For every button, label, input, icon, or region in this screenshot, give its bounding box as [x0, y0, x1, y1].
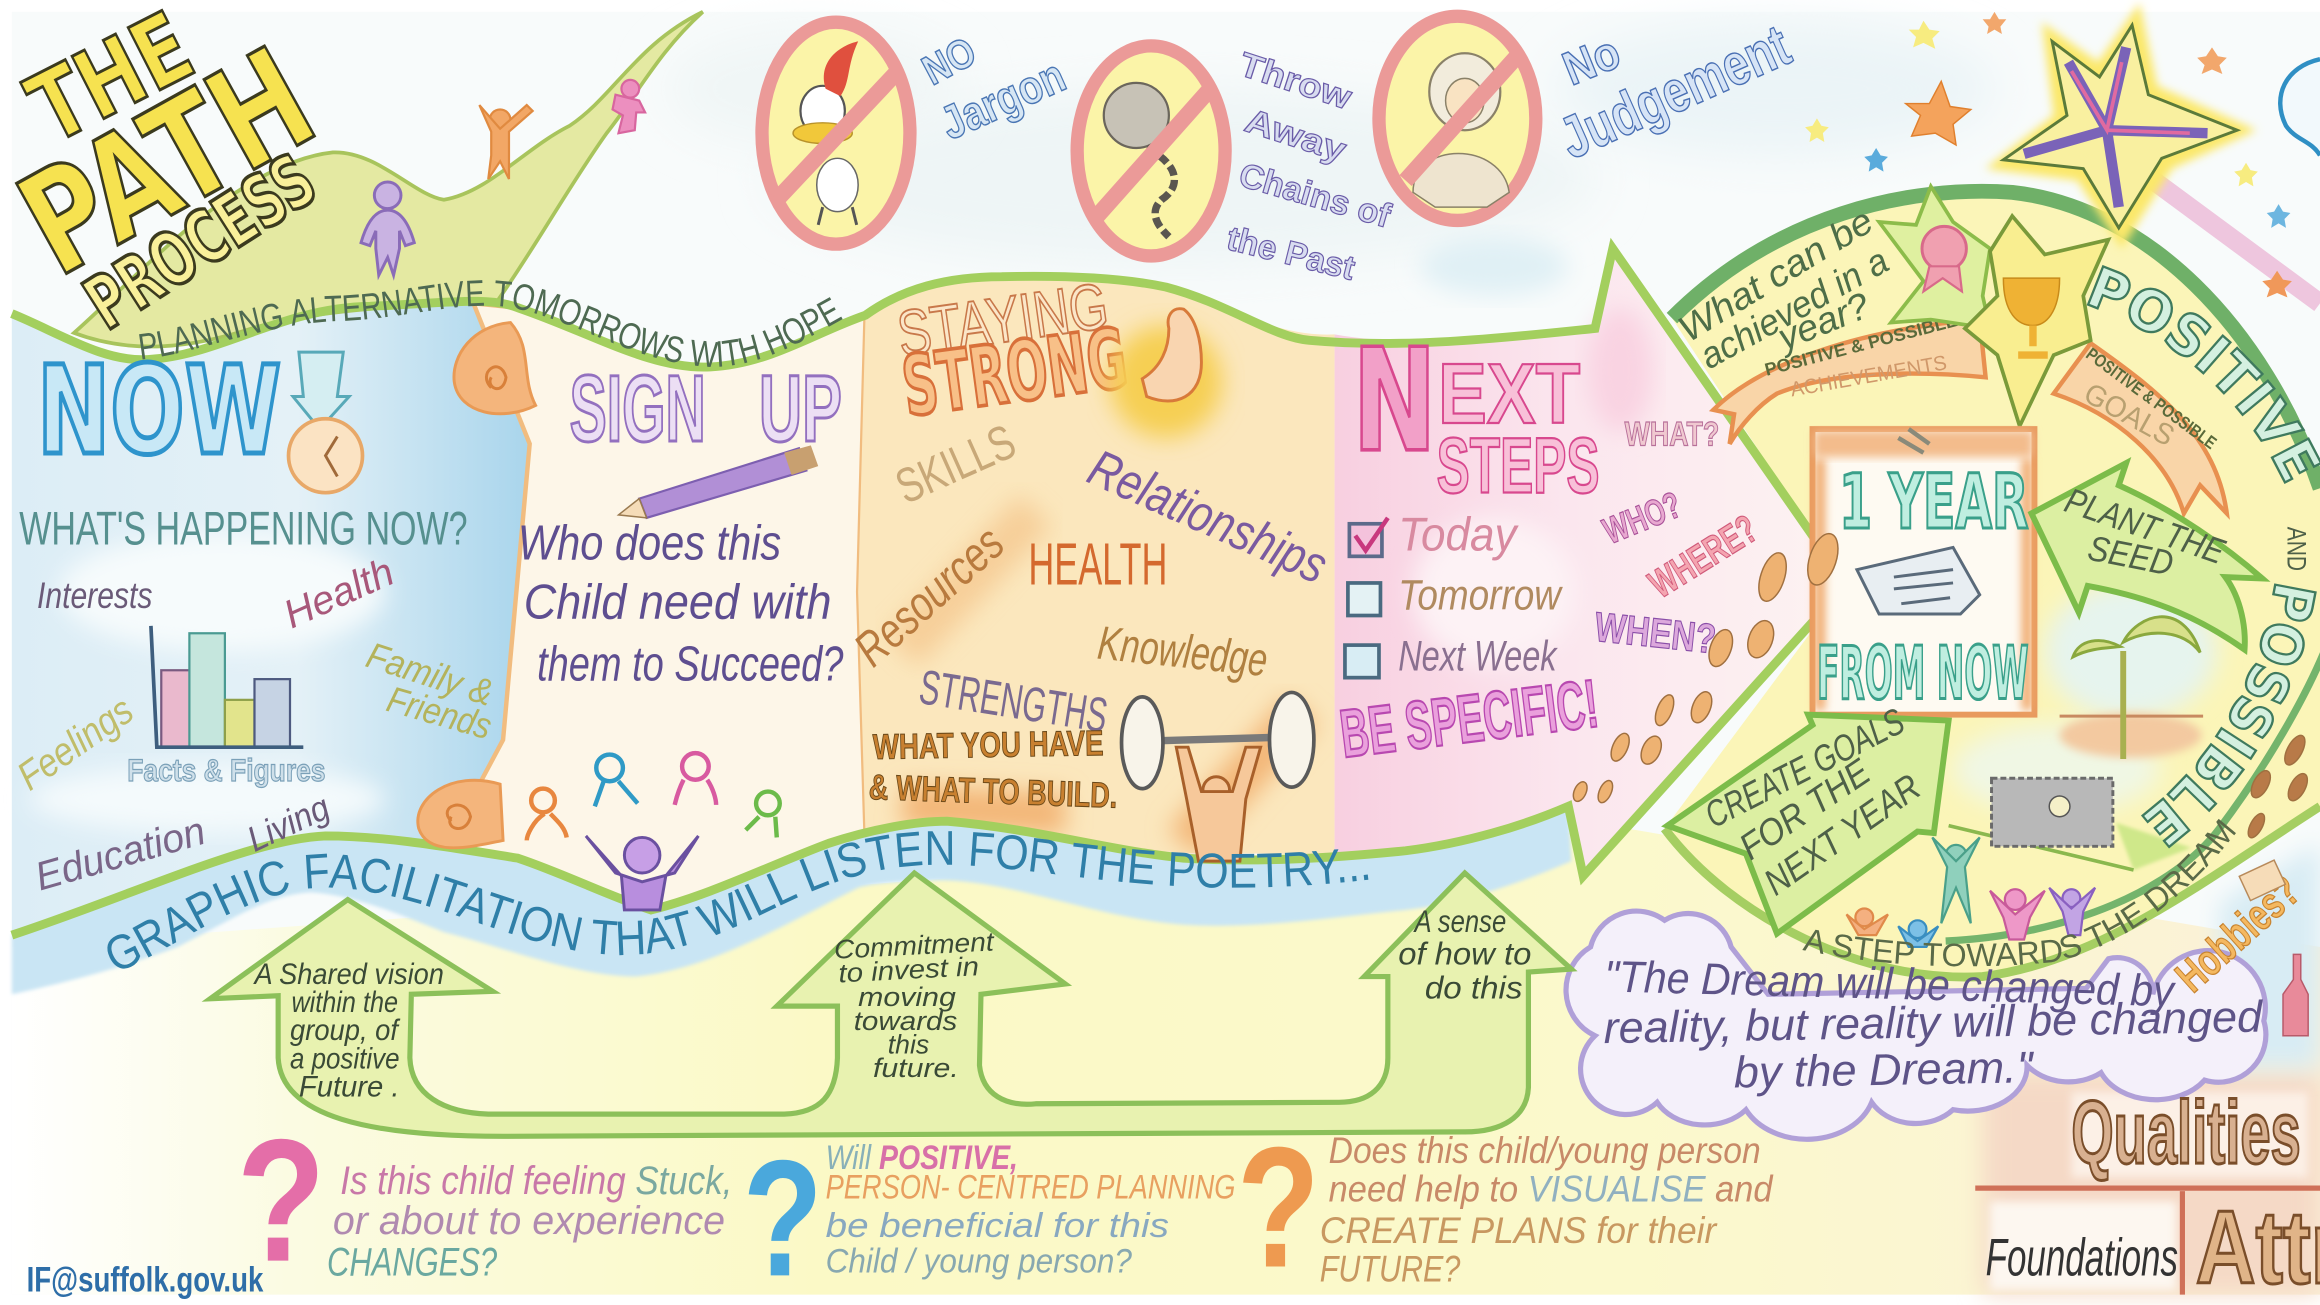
- text: does this child need help: [1320, 1130, 1774, 1289]
- arrow text: commitment: to invest in: [838, 951, 980, 988]
- callout: hobbies: [2167, 860, 2309, 1036]
- text: who does this child need: Who does this: [518, 516, 781, 570]
- text: and: AND: [2281, 527, 2311, 571]
- panel: one year from now board: [1812, 429, 2034, 716]
- text: throw away chains of the past: [1223, 45, 1395, 288]
- heading: next steps: STEPS: [1437, 422, 1599, 510]
- text: will positive person-centred planning: Will POSITIVE,: [826, 1139, 1018, 1177]
- icon: no judgement sign: [1379, 16, 1536, 220]
- text: what you have and what to build: [868, 723, 1118, 816]
- banner: positive and possible achievements: ACHIEVEMENTS: [1789, 351, 1949, 401]
- quote cloud: by the Dream.": [1733, 1043, 2035, 1097]
- arrow: create goals for the next year: [1668, 700, 1949, 934]
- banner: positive and possible goals: GOALS: [2078, 377, 2180, 453]
- text: be specific: BE SPECIFIC!: [1336, 665, 1602, 772]
- panel: staying strong: [858, 276, 1335, 855]
- icon: goal and field: [1949, 778, 2134, 870]
- panel: next steps: [1335, 249, 1847, 873]
- text: what can be achieved: achieved in a: [1693, 240, 1895, 377]
- arrow text: shared vision: within the: [291, 986, 398, 1019]
- text: is this child feeling stuck: [327, 1159, 732, 1284]
- icons: footprints: [1571, 530, 2311, 840]
- icon: purple person arms up: [586, 836, 698, 910]
- question mark: pink: ?: [237, 1103, 326, 1298]
- text: knowledge: Knowledge: [1095, 617, 1270, 687]
- blue band below the lower green line: [12, 806, 1571, 994]
- icon: down arrow and clock: [289, 352, 362, 493]
- icon: bicep and sun: [1110, 309, 1222, 438]
- hill: [74, 12, 703, 347]
- text: health label: Health: [277, 550, 401, 637]
- arrow text: sense of how: [1398, 904, 1531, 1006]
- arrow text: commitment: moving: [858, 982, 956, 1012]
- panel: now: [12, 301, 530, 935]
- quote cloud: "The Dream will be changed by: [1604, 952, 2177, 1016]
- panel: positive and possible circle: [1665, 191, 2320, 977]
- band text: graphic facilitation: GRAPHIC FACILITATION THAT WILL LISTEN FOR THE POETRY...: [107, 831, 1368, 969]
- text: throw away chains of the past: Chains of: [1235, 156, 1395, 236]
- text: will positive person-centred planning: PERSON- CENTRED PLANNING: [826, 1168, 1235, 1206]
- arrow text: commitment: future.: [873, 1053, 959, 1083]
- text: where: WHERE?: [1642, 507, 1765, 607]
- icon: weightlifter: [1122, 692, 1314, 861]
- upper wavy green line and arrow: [12, 249, 1847, 584]
- icon: scroll curls: [418, 323, 536, 848]
- quote cloud: [1566, 911, 2266, 1139]
- three linked up arrows: [210, 873, 1571, 1136]
- arrow text: shared vision: a positive: [290, 1042, 399, 1075]
- arrow text: sense of how: A sense: [1413, 904, 1506, 939]
- panel: sign up: [444, 303, 866, 910]
- arrow: plant the seed: PLANT THE: [2060, 480, 2230, 572]
- text: education: Education: [30, 809, 210, 899]
- icon: wand: [2145, 175, 2320, 303]
- text: what you have and what to build: WHAT YOU HAVE: [872, 723, 1104, 767]
- text: throw away chains of the past: Throw: [1234, 45, 1357, 117]
- text: resources: Resources: [844, 516, 1014, 677]
- text: when: WHEN?: [1593, 604, 1718, 662]
- text: does this child need help: FUTURE?: [1320, 1248, 1461, 1289]
- icon: sprout: [2060, 617, 2203, 759]
- text: will positive person-centred planning: [826, 1139, 1235, 1280]
- heading: sign up: UP: [759, 356, 842, 462]
- text: is this child feeling stuck: CHANGES?: [327, 1240, 498, 1284]
- panel: one year from now board: FROM NOW: [1817, 631, 2029, 716]
- text: throw away chains of the past: Away: [1240, 102, 1351, 170]
- icon: trophy star: [1965, 216, 2108, 426]
- panel: qualities wash: [1983, 1073, 2320, 1295]
- heading: strong: STRONG: [897, 309, 1133, 435]
- panel: right blue wash: [2219, 843, 2320, 1068]
- text: interests: Interests: [37, 575, 152, 616]
- dark green arch: [1672, 191, 2320, 488]
- text: family and friends: Friends: [382, 678, 496, 747]
- question mark: orange: ?: [1237, 1113, 1320, 1304]
- text: who does this child need: Child need with: [524, 575, 832, 629]
- text: family and friends: [362, 634, 498, 747]
- icon: blue cloud fragment: [2280, 59, 2320, 155]
- heading: next steps: EXT: [1438, 346, 1580, 442]
- arrow text: shared vision: Future .: [299, 1070, 399, 1103]
- panel: one year from now board: 1 YEAR: [1839, 457, 2029, 546]
- text: foundations: Foundations: [1986, 1228, 2178, 1287]
- text: what you have and what to build: & WHAT TO BUILD.: [868, 767, 1118, 816]
- arrow: plant the seed: [2031, 463, 2262, 650]
- text: living: Living: [241, 787, 336, 859]
- arrow text: commitment: towards: [854, 1006, 957, 1036]
- text: who does this child need: them to Succeed?: [537, 638, 843, 692]
- text: who: WHO?: [1597, 484, 1687, 552]
- text: does this child need help: CREATE PLANS for their: [1320, 1210, 1718, 1251]
- heading: staying: STAYING: [893, 269, 1113, 370]
- heading: now: NOW: [37, 340, 281, 483]
- icon: orange person: [479, 105, 533, 179]
- lower circle edge: [1665, 806, 2320, 977]
- arrow text: shared vision: A Shared vision: [253, 958, 444, 991]
- text: contact email: IF@suffolk.gov.uk: [27, 1260, 264, 1300]
- icon: pencil: [618, 445, 818, 518]
- icons: team people: [527, 753, 780, 840]
- checklist: today tomorrow next week: Tomorrow: [1398, 572, 1564, 620]
- arrow: create goals for the next year: CREATE GOALS: [1698, 700, 1911, 836]
- text: who does this child need: [518, 516, 843, 692]
- text: health strength: HEALTH: [1028, 530, 1167, 597]
- arrow: plant the seed: SEED: [2085, 528, 2177, 584]
- text: is this child feeling stuck: Is this child feeling Stuck,: [340, 1159, 732, 1203]
- arrow text: commitment: [833, 926, 996, 1083]
- text: facts and figures: Facts & Figures: [127, 753, 326, 788]
- icon: purple person: [361, 182, 414, 275]
- bar chart: facts and figures: [151, 626, 303, 747]
- banner: positive and possible goals: POSITIVE & POSSIBLE: [2082, 344, 2220, 453]
- band heading: planning alternative tomorrows with hope: PLANNING ALTERNATIVE TOMORROWS WITH HOPE: [139, 280, 842, 367]
- text: does this child need help: Does this child/young person: [1329, 1130, 1761, 1171]
- checklist: today tomorrow next week: Next Week: [1398, 632, 1558, 680]
- banner: positive and possible achievements: POSITIVE & POSSIBLE: [1763, 310, 1960, 380]
- text: what: WHAT?: [1625, 415, 1719, 453]
- lower yellow wash: [12, 829, 2320, 1295]
- dark green inner edge near possible: [1946, 636, 2320, 941]
- text: family and friends: Family &: [362, 634, 498, 714]
- icon: no jargon sign: [762, 22, 910, 244]
- arrow text: shared vision: [253, 958, 444, 1103]
- text: throw away chains of the past: the Past: [1223, 219, 1359, 288]
- icons: small stars: [1805, 12, 2292, 297]
- text: will positive person-centred planning: Child / young person?: [826, 1242, 1132, 1280]
- icon: calendar: [1857, 547, 1980, 614]
- checklist: today tomorrow next week: [1345, 508, 1564, 680]
- arrow text: commitment: Commitment: [833, 926, 996, 965]
- arrow text: shared vision: group, of: [290, 1014, 401, 1047]
- text: skills: SKILLS: [888, 415, 1024, 515]
- text: strengths: STRENGTHS: [916, 660, 1111, 743]
- text: relationships: Relationships: [1080, 438, 1336, 594]
- text: does this child need help: need help to VISUALISE and: [1329, 1168, 1774, 1209]
- quote cloud: reality, but reality will be changed: [1603, 993, 2264, 1053]
- banner: positive and possible goals: [2054, 343, 2227, 513]
- heading: next steps: N: [1352, 318, 1437, 483]
- arrow: create goals for the next year: FOR THE: [1732, 751, 1878, 868]
- text: what can be achieved: year?: [1769, 284, 1876, 359]
- lower wavy green line and arrow: [12, 584, 1847, 935]
- icon: pink person: [613, 80, 645, 133]
- text: will positive person-centred planning: be beneficial for this: [826, 1207, 1169, 1245]
- arrow text: sense of how: of how to: [1398, 937, 1531, 972]
- icons: cheering people: [1847, 837, 2095, 947]
- icon: rosette star: [1879, 186, 1990, 328]
- text: no jargon: Jargon: [933, 49, 1073, 151]
- title: PROCESS: [70, 137, 331, 346]
- heading: next steps: [1352, 318, 1599, 510]
- title: PATH: [0, 16, 339, 307]
- banner: positive and possible achievements: [1713, 310, 1986, 444]
- arrow: create goals for the next year: NEXT YEAR: [1757, 766, 1928, 903]
- text: no jargon: NO: [915, 28, 983, 94]
- arrow text: commitment: this: [888, 1029, 929, 1059]
- icon: big rainbow star: [1986, 3, 2256, 249]
- text: what's happening now: WHAT'S HAPPENING NOW?: [19, 502, 468, 555]
- text: no judgement: No: [1556, 26, 1628, 96]
- icon: chains of the past sign: [1077, 46, 1225, 256]
- text: what can be achieved: What can be: [1671, 200, 1880, 350]
- text: is this child feeling stuck: or about to experience: [333, 1199, 725, 1243]
- checklist: today tomorrow next week: Today: [1398, 508, 1520, 561]
- arrow text: sense of how: do this: [1425, 971, 1523, 1006]
- text: feelings: Feelings: [10, 688, 141, 799]
- divider lines: qualities table: [1975, 1188, 2320, 1295]
- heading: sign up: SIGN: [570, 356, 706, 462]
